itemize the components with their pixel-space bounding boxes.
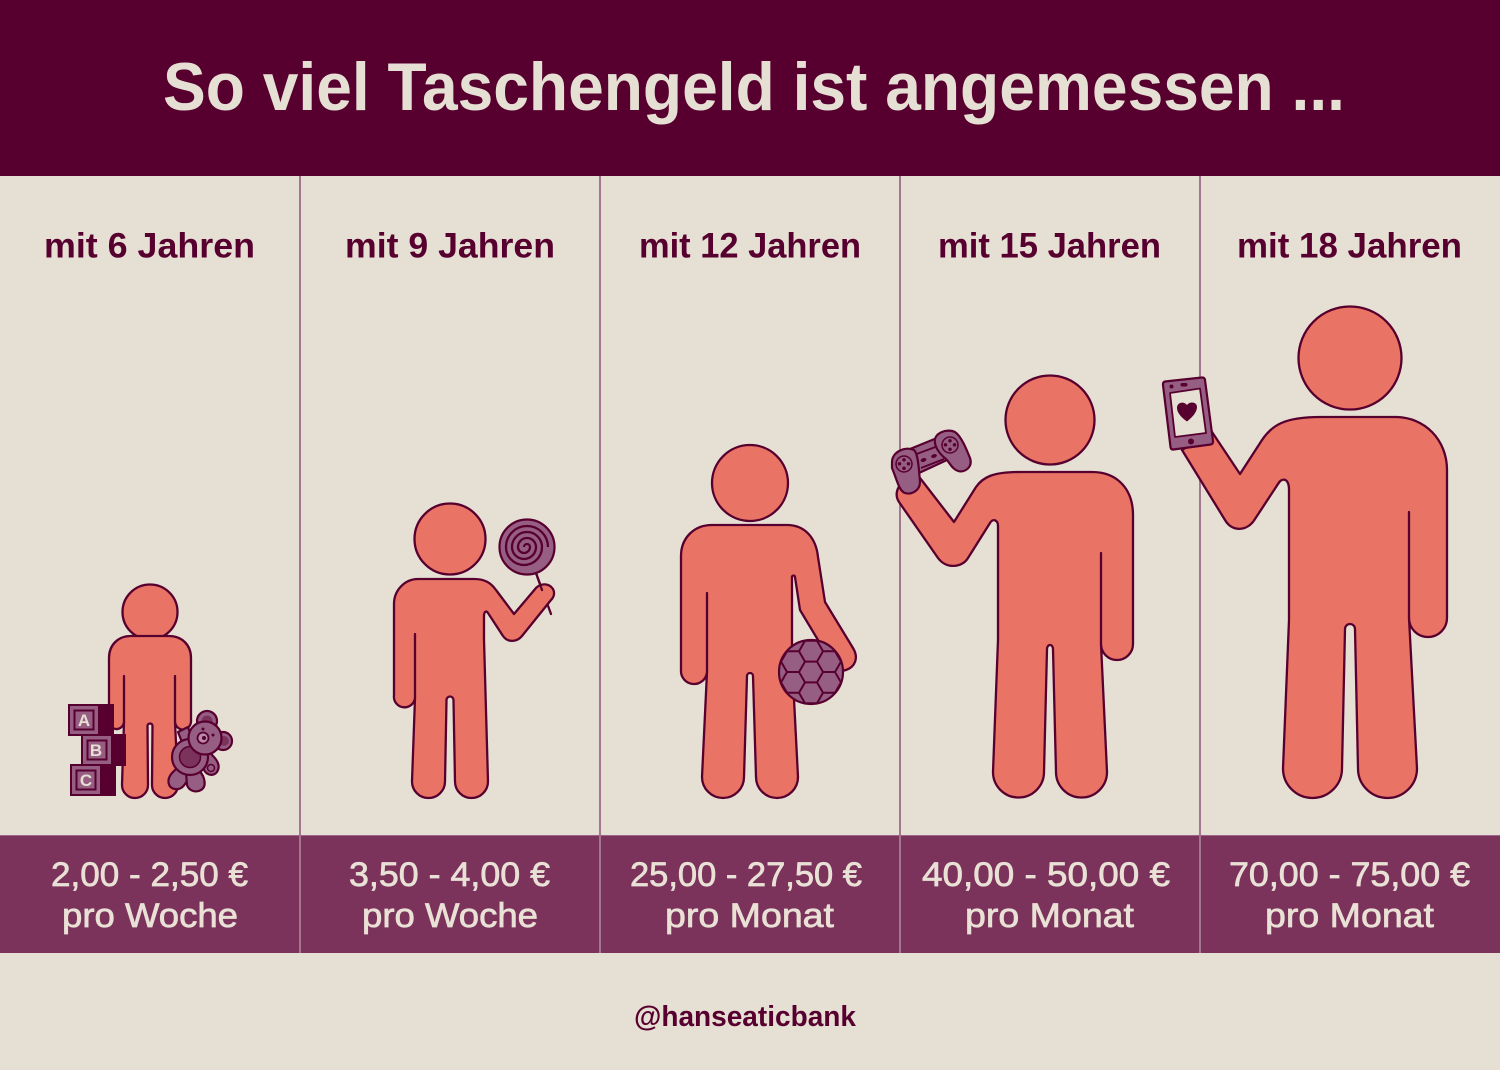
figure: 15-year-old with game controller — [892, 376, 1133, 798]
price: age 12: pro Monat — [665, 897, 835, 935]
head — [414, 504, 486, 574]
figure: 9-year-old with lollipop — [394, 504, 554, 798]
heading: age 6: mit 6 Jahren — [44, 226, 255, 266]
figure: 12-year-old with football — [681, 445, 856, 798]
header band — [0, 0, 1500, 176]
body — [897, 472, 1133, 798]
price: age 15 — [922, 856, 1170, 935]
price: age 9: pro Woche — [362, 897, 538, 935]
price: age 6 — [51, 856, 248, 935]
head — [122, 584, 178, 640]
icon: lollipop — [500, 520, 554, 574]
body — [681, 525, 856, 798]
price: age 12 — [630, 856, 862, 935]
price: age 18: 70,00 - 75,00 € — [1229, 856, 1470, 894]
heading: age 15: mit 15 Jahren — [938, 226, 1161, 266]
figure: 6-year-old with blocks and teddy — [68, 584, 232, 798]
icon: teddy bear — [168, 711, 232, 791]
icon: alphabet blocks: C — [80, 771, 92, 790]
icon: football — [779, 640, 843, 704]
body — [109, 636, 191, 798]
icon: alphabet blocks: A — [78, 711, 90, 730]
heading: age 18: mit 18 Jahren — [1237, 226, 1462, 266]
icon: game controller — [892, 431, 971, 494]
icon: alphabet blocks — [68, 704, 126, 796]
price: age 6: 2,00 - 2,50 € — [51, 856, 248, 894]
price: age 15: pro Monat — [965, 897, 1135, 935]
head — [1298, 306, 1402, 410]
price: age 18 — [1229, 856, 1470, 935]
icon: lollipop stick — [536, 573, 551, 614]
footer handle: @hanseaticbank — [634, 1001, 857, 1033]
icon: alphabet blocks: B — [90, 741, 102, 760]
head — [712, 445, 788, 521]
heading: age 12: mit 12 Jahren — [639, 226, 861, 266]
price band — [0, 835, 1500, 953]
title: So viel Taschengeld ist angemessen ... — [163, 49, 1345, 125]
price: age 18: pro Monat — [1265, 897, 1435, 935]
body — [1182, 417, 1447, 798]
icon: smartphone with heart — [1163, 377, 1213, 450]
head — [1006, 376, 1094, 464]
heading: age 9: mit 9 Jahren — [345, 226, 555, 266]
price: age 15: 40,00 - 50,00 € — [922, 856, 1170, 894]
price: age 9 — [349, 856, 550, 935]
figure: 18-year-old with smartphone — [1163, 306, 1447, 798]
price: age 9: 3,50 - 4,00 € — [349, 856, 550, 894]
price: age 12: 25,00 - 27,50 € — [630, 856, 862, 894]
body — [394, 579, 554, 798]
price: age 6: pro Woche — [62, 897, 238, 935]
